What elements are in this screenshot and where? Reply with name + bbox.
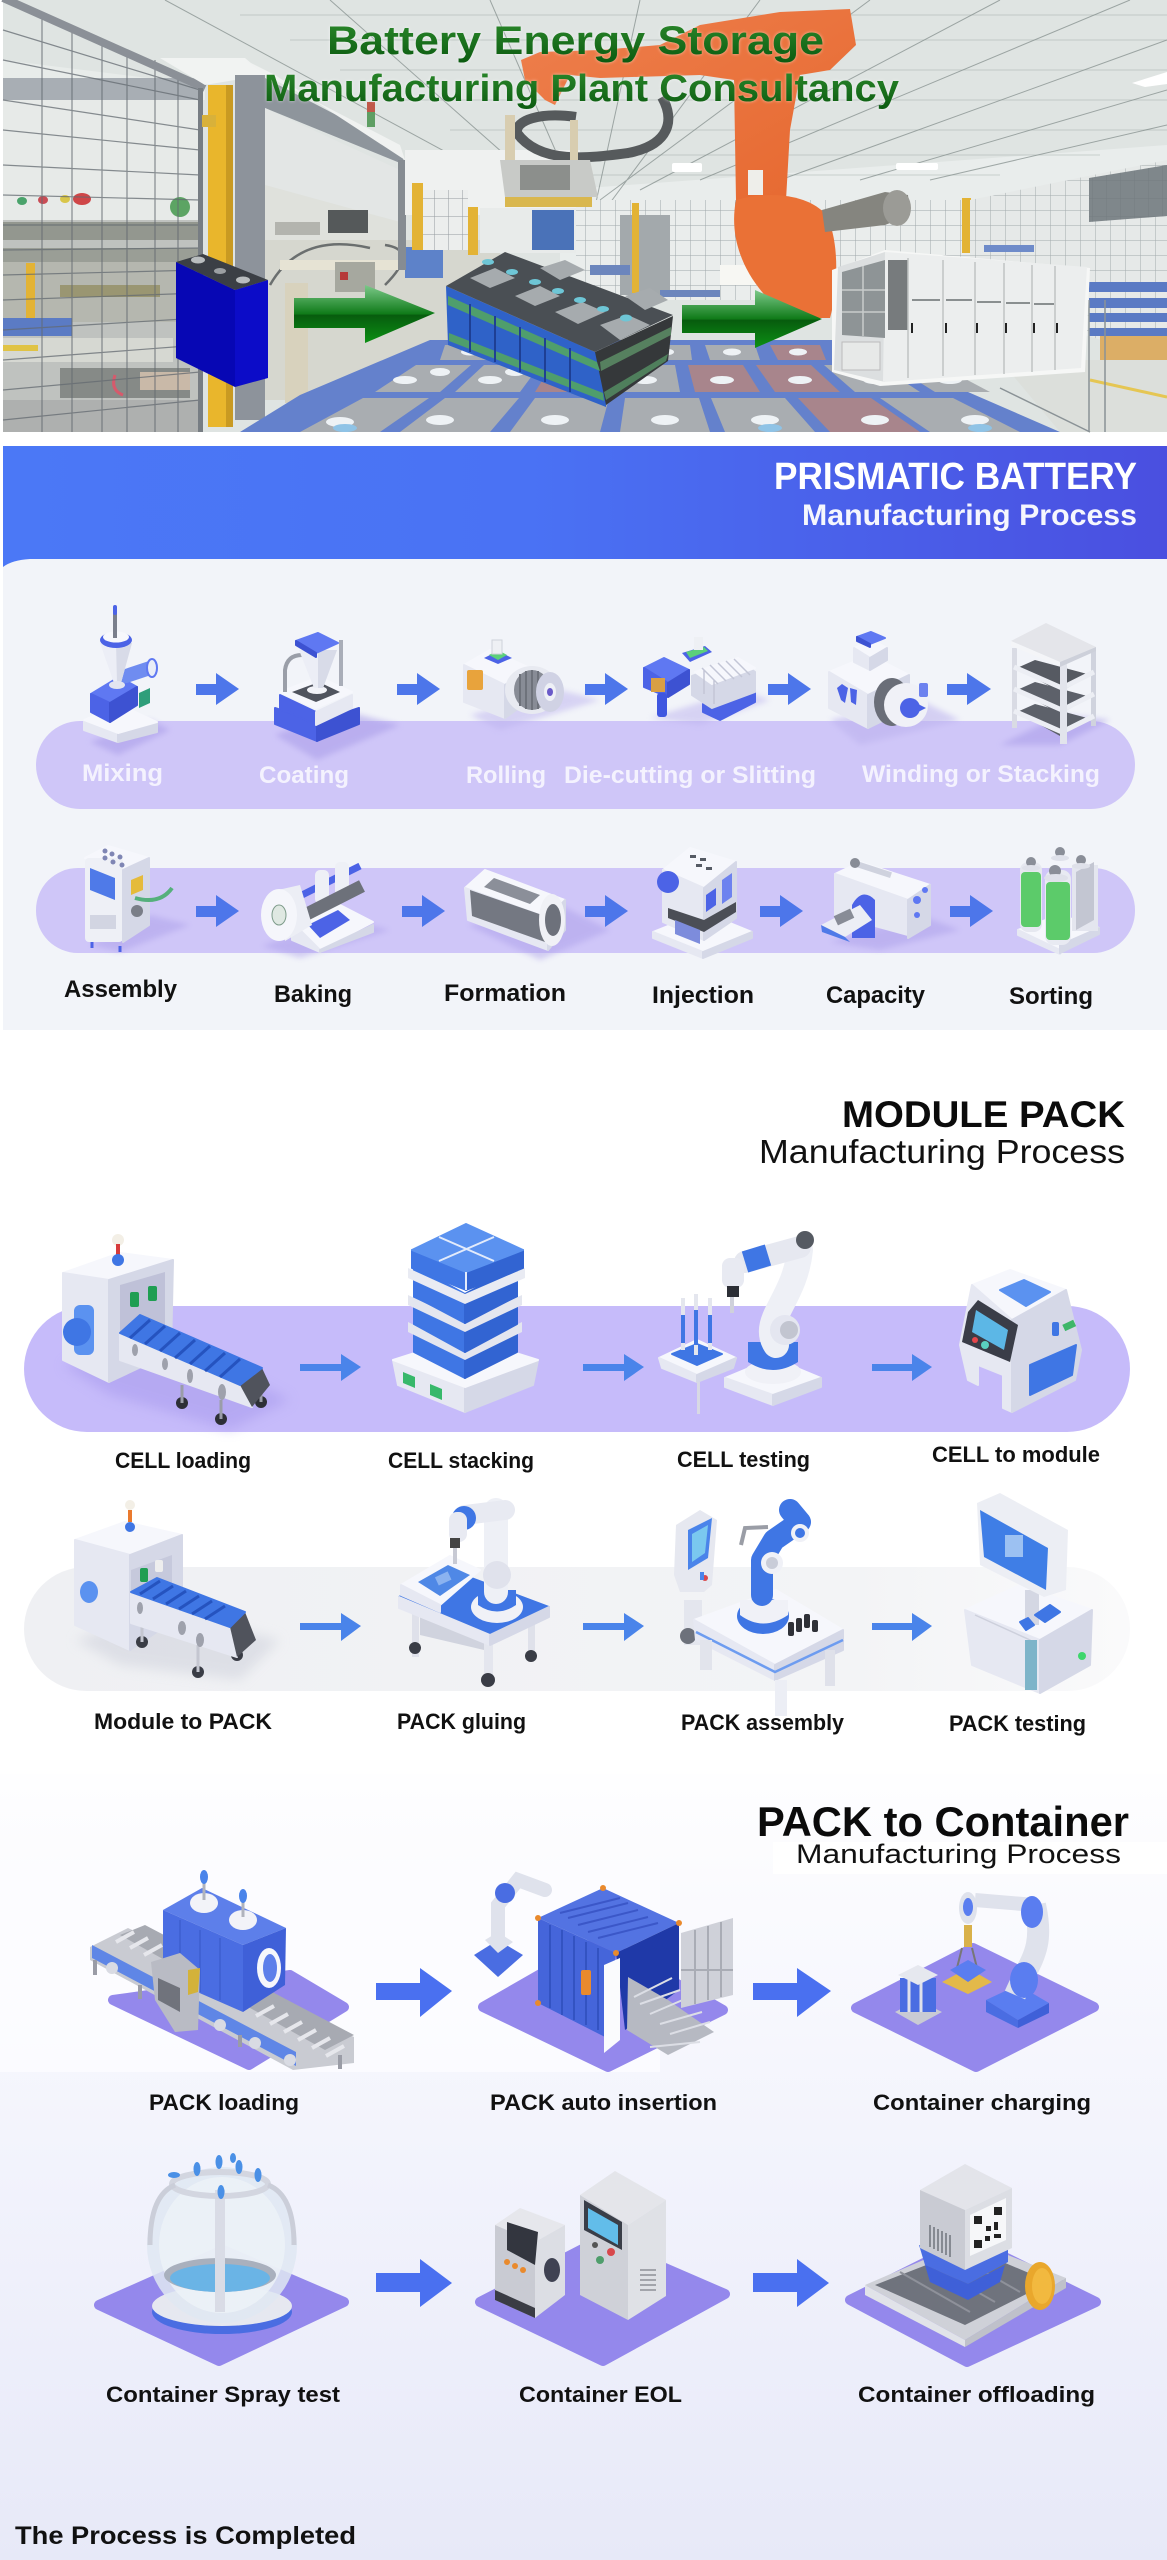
closing text: The Process is Completed (15, 2522, 356, 2550)
label: cell stacking: CELL stacking (388, 1448, 534, 1473)
panel: prismatic battery manufacturing process (3, 446, 1167, 1030)
arrow (583, 1354, 644, 1381)
icon: winding or stacking (829, 632, 960, 745)
process track: purple (24, 1306, 1130, 1432)
label: cell to module: CELL to module (932, 1442, 1100, 1467)
icon: cell testing robot (659, 1231, 821, 1414)
label: winding or stacking: Winding or Stacking (862, 761, 1100, 788)
icon: pack auto insertion (474, 1880, 733, 2067)
icon: cell stacking tower (393, 1224, 538, 1412)
arrow (753, 1968, 831, 2017)
icon: coating (275, 633, 400, 760)
arrow: green cell to module (294, 285, 435, 343)
icon: cell loading conveyor (63, 1234, 290, 1430)
panel: hero factory photo banner (3, 0, 1167, 432)
hanging gripper with cable (500, 97, 668, 250)
icon: cell to module machine (960, 1270, 1081, 1412)
title (264, 19, 899, 110)
label: mixing: Mixing (82, 760, 163, 787)
icon: rolling (464, 640, 600, 730)
label: cell loading: CELL loading (115, 1448, 251, 1473)
icon: pack assembly robot (674, 1510, 843, 1716)
label: module to pack: Module to PACK (94, 1709, 272, 1734)
label: rolling: Rolling (466, 762, 546, 789)
label: pack loading: PACK loading (149, 2090, 299, 2115)
label: sorting: Sorting (1009, 983, 1093, 1010)
icon: die-cutting or slitting (644, 637, 770, 725)
subheading: manufacturing process: Manufacturing Process (796, 1839, 1121, 1869)
arrow (583, 1613, 644, 1641)
white strip behind first row (0, 1860, 660, 2072)
section background (0, 1774, 1167, 2560)
title: Manufacturing Plant Consultancy (264, 68, 899, 110)
arrow (196, 673, 239, 705)
heading: module pack: MODULE PACK (842, 1094, 1125, 1135)
title: Manufacturing Plant Consultancy (264, 68, 899, 110)
label: cell testing: CELL testing (677, 1447, 810, 1472)
arrow (397, 673, 440, 705)
label: container spray test: Container Spray test (106, 2382, 341, 2407)
icon: capacity (821, 858, 960, 950)
panel: pack to container manufacturing process (0, 1774, 1167, 2560)
label: assembly: Assembly (64, 976, 178, 1003)
icon: pack gluing robot table (399, 1506, 549, 1687)
label: injection: Injection (652, 982, 754, 1009)
process track: lower (36, 868, 1135, 953)
label: container EOL: Container EOL (519, 2382, 682, 2407)
ceiling and hall background (3, 0, 1167, 432)
icon: container spray test (99, 2153, 344, 2361)
arrow (872, 1613, 932, 1641)
arrow (376, 2259, 452, 2307)
arrow: green module to container (682, 290, 822, 348)
arrow (768, 673, 811, 705)
icon: baking (261, 862, 390, 958)
heading: pack to container: PACK to Container (757, 1798, 1129, 1845)
heading: prismatic battery: PRISMATIC BATTERY (774, 456, 1137, 498)
panel: module pack manufacturing process (24, 1094, 1130, 1736)
label: capacity: Capacity (826, 982, 926, 1009)
icon: sorting (1018, 847, 1099, 954)
subheading: manufacturing process: Manufacturing Process (802, 499, 1137, 532)
panel background (3, 556, 1167, 1030)
process track: grey (24, 1567, 1130, 1691)
icon: white BESS container (832, 250, 1090, 386)
header band (3, 446, 1167, 567)
title: Battery Energy Storage (327, 19, 824, 63)
arrow (402, 895, 445, 927)
back fence (405, 150, 1167, 432)
label: container charging: Container charging (873, 2090, 1091, 2115)
icon: injection (653, 848, 752, 958)
label: pack assembly: PACK assembly (681, 1710, 845, 1735)
orange robot arm (521, 9, 911, 318)
arrow (947, 673, 991, 705)
icon: single prismatic cell in blue (176, 254, 268, 387)
arrow (950, 895, 993, 927)
icon: shelf rack (1000, 623, 1110, 745)
subheading: manufacturing process: Manufacturing Process (759, 1133, 1125, 1170)
arrow (753, 2259, 829, 2307)
label: container offloading: Container offloading (858, 2382, 1095, 2407)
battery floor (240, 340, 1060, 432)
icon: battery module (446, 252, 673, 407)
icon: container offloading (850, 2164, 1096, 2362)
label: baking: Baking (274, 981, 352, 1008)
icon: assembly (85, 846, 190, 952)
icon: pack testing station (965, 1493, 1092, 1693)
icon: pack loading (90, 1870, 354, 2070)
arrow (300, 1354, 361, 1381)
title: Battery Energy Storage (327, 19, 824, 63)
icon: formation (465, 870, 610, 960)
icon: container EOL (480, 2171, 725, 2361)
arrow (585, 895, 628, 927)
label: pack gluing: PACK gluing (397, 1709, 526, 1734)
arrow (196, 895, 239, 927)
process track: upper (36, 721, 1135, 809)
icon: mixing (84, 605, 170, 755)
left caged machine (3, 0, 205, 432)
icon: module to pack conveyor (75, 1500, 280, 1680)
central machine hood and yellow safety post (160, 58, 500, 427)
arrow (300, 1613, 361, 1641)
label: pack testing: PACK testing (949, 1711, 1086, 1736)
label: formation: Formation (444, 980, 566, 1007)
arrow (760, 895, 803, 927)
arrow (585, 673, 628, 705)
arrow (872, 1354, 932, 1381)
icon: container charging (856, 1892, 1094, 2067)
label: die-cutting or slitting: Die-cutting or Slitting (564, 762, 816, 789)
label: pack auto insertion: PACK auto insertion (490, 2090, 717, 2115)
arrow (376, 1968, 452, 2017)
label: coating: Coating (259, 762, 349, 789)
white strip behind subheading (773, 1842, 1167, 1874)
